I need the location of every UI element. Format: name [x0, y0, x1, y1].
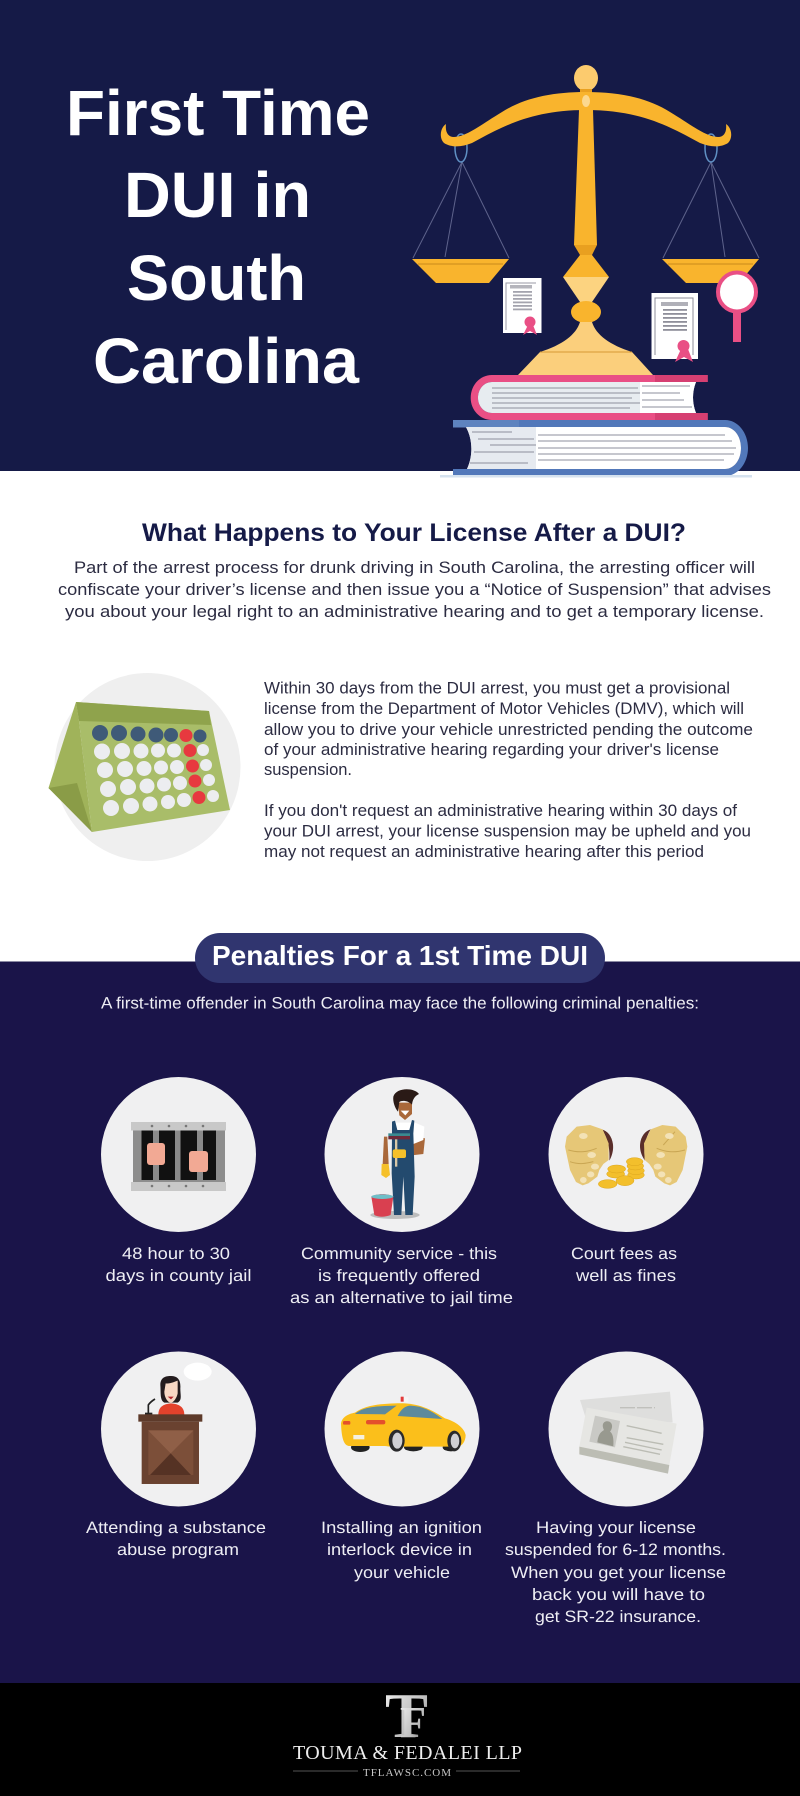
- text block: hearing deadline: your DUI arrest, your license suspension may be upheld and you: [264, 822, 751, 840]
- label: fees: Court fees as: [571, 1245, 677, 1263]
- icon: certificate right: [652, 293, 698, 362]
- label: license suspended: suspended for 6-12 months.: [505, 1541, 726, 1559]
- label: interlock: interlock device in: [327, 1541, 472, 1559]
- icon: stacked books: [453, 375, 748, 476]
- icon: jail bars: [131, 1122, 226, 1191]
- label: license suspended: back you will have to: [532, 1586, 705, 1604]
- icon: speaker at podium: [138, 1363, 212, 1484]
- text: website: TFLAWSC.COM: [363, 1767, 451, 1779]
- panel: penalties: [0, 933, 800, 1684]
- icon: certificate left: [503, 278, 542, 335]
- icon: worker with bucket: [370, 1089, 425, 1219]
- panel: footer: [0, 1680, 800, 1796]
- text block: intro: confiscate your driver’s license and then issue you a “Notice of Suspension” that advises: [58, 580, 771, 599]
- title: South: [127, 242, 306, 314]
- label: jail: days in county jail: [106, 1267, 252, 1285]
- text block: hearing deadline: may not request an administrative hearing after this period: [264, 843, 704, 861]
- title: First Time: [66, 77, 370, 149]
- label: interlock: your vehicle: [354, 1564, 450, 1582]
- heading pill: penalties: [195, 933, 605, 983]
- label: substance abuse: [86, 1519, 266, 1559]
- text block: provisional license: license from the Department of Motor Vehicles (DMV), which will: [264, 700, 744, 718]
- icon: scales of justice: [412, 65, 759, 375]
- title: [66, 77, 370, 397]
- logo: TF monogram: T: [385, 1680, 428, 1751]
- label: interlock: [321, 1519, 482, 1582]
- label: community service: Community service - this: [301, 1245, 497, 1263]
- logo: TF monogram: F: [400, 1698, 426, 1747]
- title: Carolina: [93, 325, 359, 397]
- text block: provisional license: of your administrative hearing regarding your driver's license: [264, 741, 719, 759]
- icon: yellow car: [341, 1396, 466, 1452]
- text block: provisional license: allow you to drive your vehicle unrestricted pending the outcome: [264, 721, 753, 739]
- icon: hands with coins: [565, 1125, 687, 1188]
- item: substance abuse program: [86, 1352, 266, 1559]
- text block: provisional license: suspension.: [264, 761, 352, 779]
- item: jail: [101, 1077, 256, 1285]
- icon: license cards: [579, 1392, 677, 1474]
- label: fees: [571, 1245, 677, 1285]
- item: community service: [290, 1077, 513, 1307]
- icon: magnifying glass: [718, 272, 756, 342]
- text block: provisional license: [264, 680, 753, 779]
- text block: hearing deadline: [264, 802, 751, 861]
- label: fees: well as fines: [575, 1267, 676, 1285]
- label: license suspended: When you get your license: [511, 1564, 726, 1582]
- text block: provisional license: Within 30 days from the DUI arrest, you must get a provisional: [264, 680, 730, 698]
- panel: license section: [48, 519, 771, 861]
- label: license suspended: get SR-22 insurance.: [535, 1608, 701, 1626]
- label: substance abuse: Attending a substance: [86, 1519, 266, 1537]
- label: substance abuse: abuse program: [117, 1541, 239, 1559]
- title: DUI in: [124, 159, 311, 231]
- text block: intro: you about your legal right to an administrative hearing and to get a temporary license.: [65, 602, 764, 621]
- text block: intro: [58, 558, 771, 621]
- decorative shadow under books: [440, 475, 752, 478]
- label: license suspended: [505, 1519, 726, 1626]
- label: community service: as an alternative to jail time: [290, 1289, 513, 1307]
- label: community service: [290, 1245, 513, 1307]
- heading pill: penalties: Penalties For a 1st Time DUI: [212, 940, 588, 971]
- label: community service: is frequently offered: [318, 1267, 480, 1285]
- text block: intro: Part of the arrest process for drunk driving in South Carolina, the arresting officer will: [74, 558, 755, 577]
- heading: license: What Happens to Your License After a DUI?: [142, 519, 686, 547]
- item: fees and fines: [548, 1077, 704, 1285]
- label: jail: 48 hour to 30: [122, 1245, 230, 1263]
- item: ignition interlock: [321, 1352, 482, 1582]
- text block: hearing deadline: If you don't request an administrative hearing within 30 days of: [264, 802, 737, 820]
- label: jail: [106, 1245, 252, 1285]
- label: license suspended: Having your license: [536, 1519, 696, 1537]
- panel: header: [0, 0, 800, 476]
- icon: calendar: [48, 673, 240, 861]
- text: penalties intro: A first-time offender in South Carolina may face the following criminal penalties:: [101, 994, 699, 1012]
- label: interlock: Installing an ignition: [321, 1519, 482, 1537]
- text: firm name: TOUMA & FEDALEI LLP: [293, 1742, 522, 1764]
- item: license suspended: [505, 1352, 726, 1626]
